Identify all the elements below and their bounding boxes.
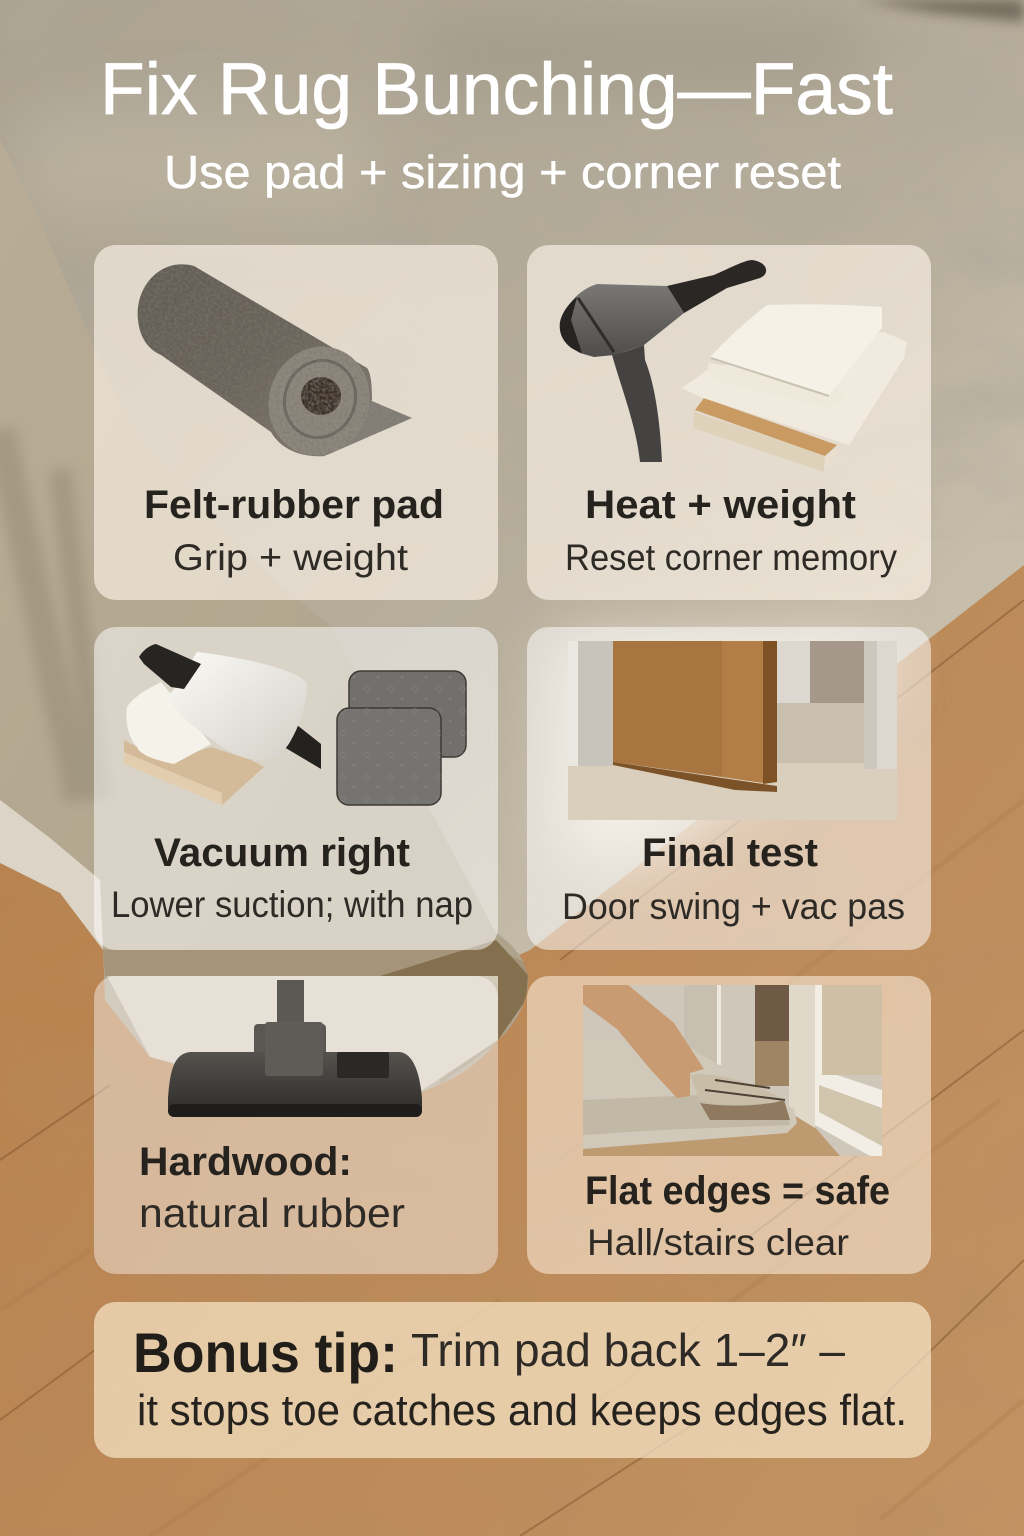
photo: hand lifting rug corner	[583, 984, 882, 1156]
icon: towels	[682, 304, 907, 445]
panel: heat + weight	[527, 245, 931, 600]
callout: bonus tip	[94, 1302, 931, 1458]
heading: hardwood: Hardwood:	[139, 1140, 352, 1184]
icon: white steamer	[139, 644, 321, 769]
panel: flat edges	[527, 976, 931, 1274]
icon: hair dryer	[560, 260, 766, 462]
heading: heat + weight: Heat + weight	[585, 483, 856, 527]
heading: bonus tip: Bonus tip:	[133, 1321, 398, 1384]
icon: book	[693, 358, 904, 472]
icon: book	[124, 740, 264, 805]
heading: flat edges: Flat edges = safe	[585, 1169, 890, 1213]
heading: felt-rubber pad: Felt-rubber pad	[144, 483, 444, 527]
icon: vacuum head	[168, 980, 422, 1117]
title: Fix Rug Bunching—Fast	[100, 49, 893, 130]
heading: final test: Final test	[642, 831, 818, 875]
text: grip + weight: Grip + weight	[173, 537, 409, 578]
icon: towel	[126, 682, 211, 764]
panel: hardwood	[94, 976, 498, 1274]
icon: felt pad roll	[138, 264, 412, 470]
text: hall/stairs clear: Hall/stairs clear	[587, 1222, 849, 1263]
text: door swing: Door swing + vac pas	[562, 886, 905, 927]
panel: vacuum right	[94, 627, 498, 950]
subtitle: Use pad + sizing + corner reset	[164, 146, 841, 198]
text: benefit: it stops toe catches and keeps edges flat.	[137, 1386, 907, 1435]
photo: door over carpet	[568, 641, 897, 820]
panel: felt-rubber pad	[94, 245, 498, 600]
icon: gripper pads	[337, 671, 466, 805]
panel: final test	[527, 627, 931, 950]
text: trim pad: Trim pad back 1–2″ –	[411, 1324, 845, 1376]
text: lower suction: Lower suction; with nap	[111, 884, 473, 925]
text: reset corner memory: Reset corner memory	[565, 537, 897, 578]
heading: vacuum right: Vacuum right	[154, 831, 410, 875]
text: natural rubber: natural rubber	[139, 1190, 405, 1236]
